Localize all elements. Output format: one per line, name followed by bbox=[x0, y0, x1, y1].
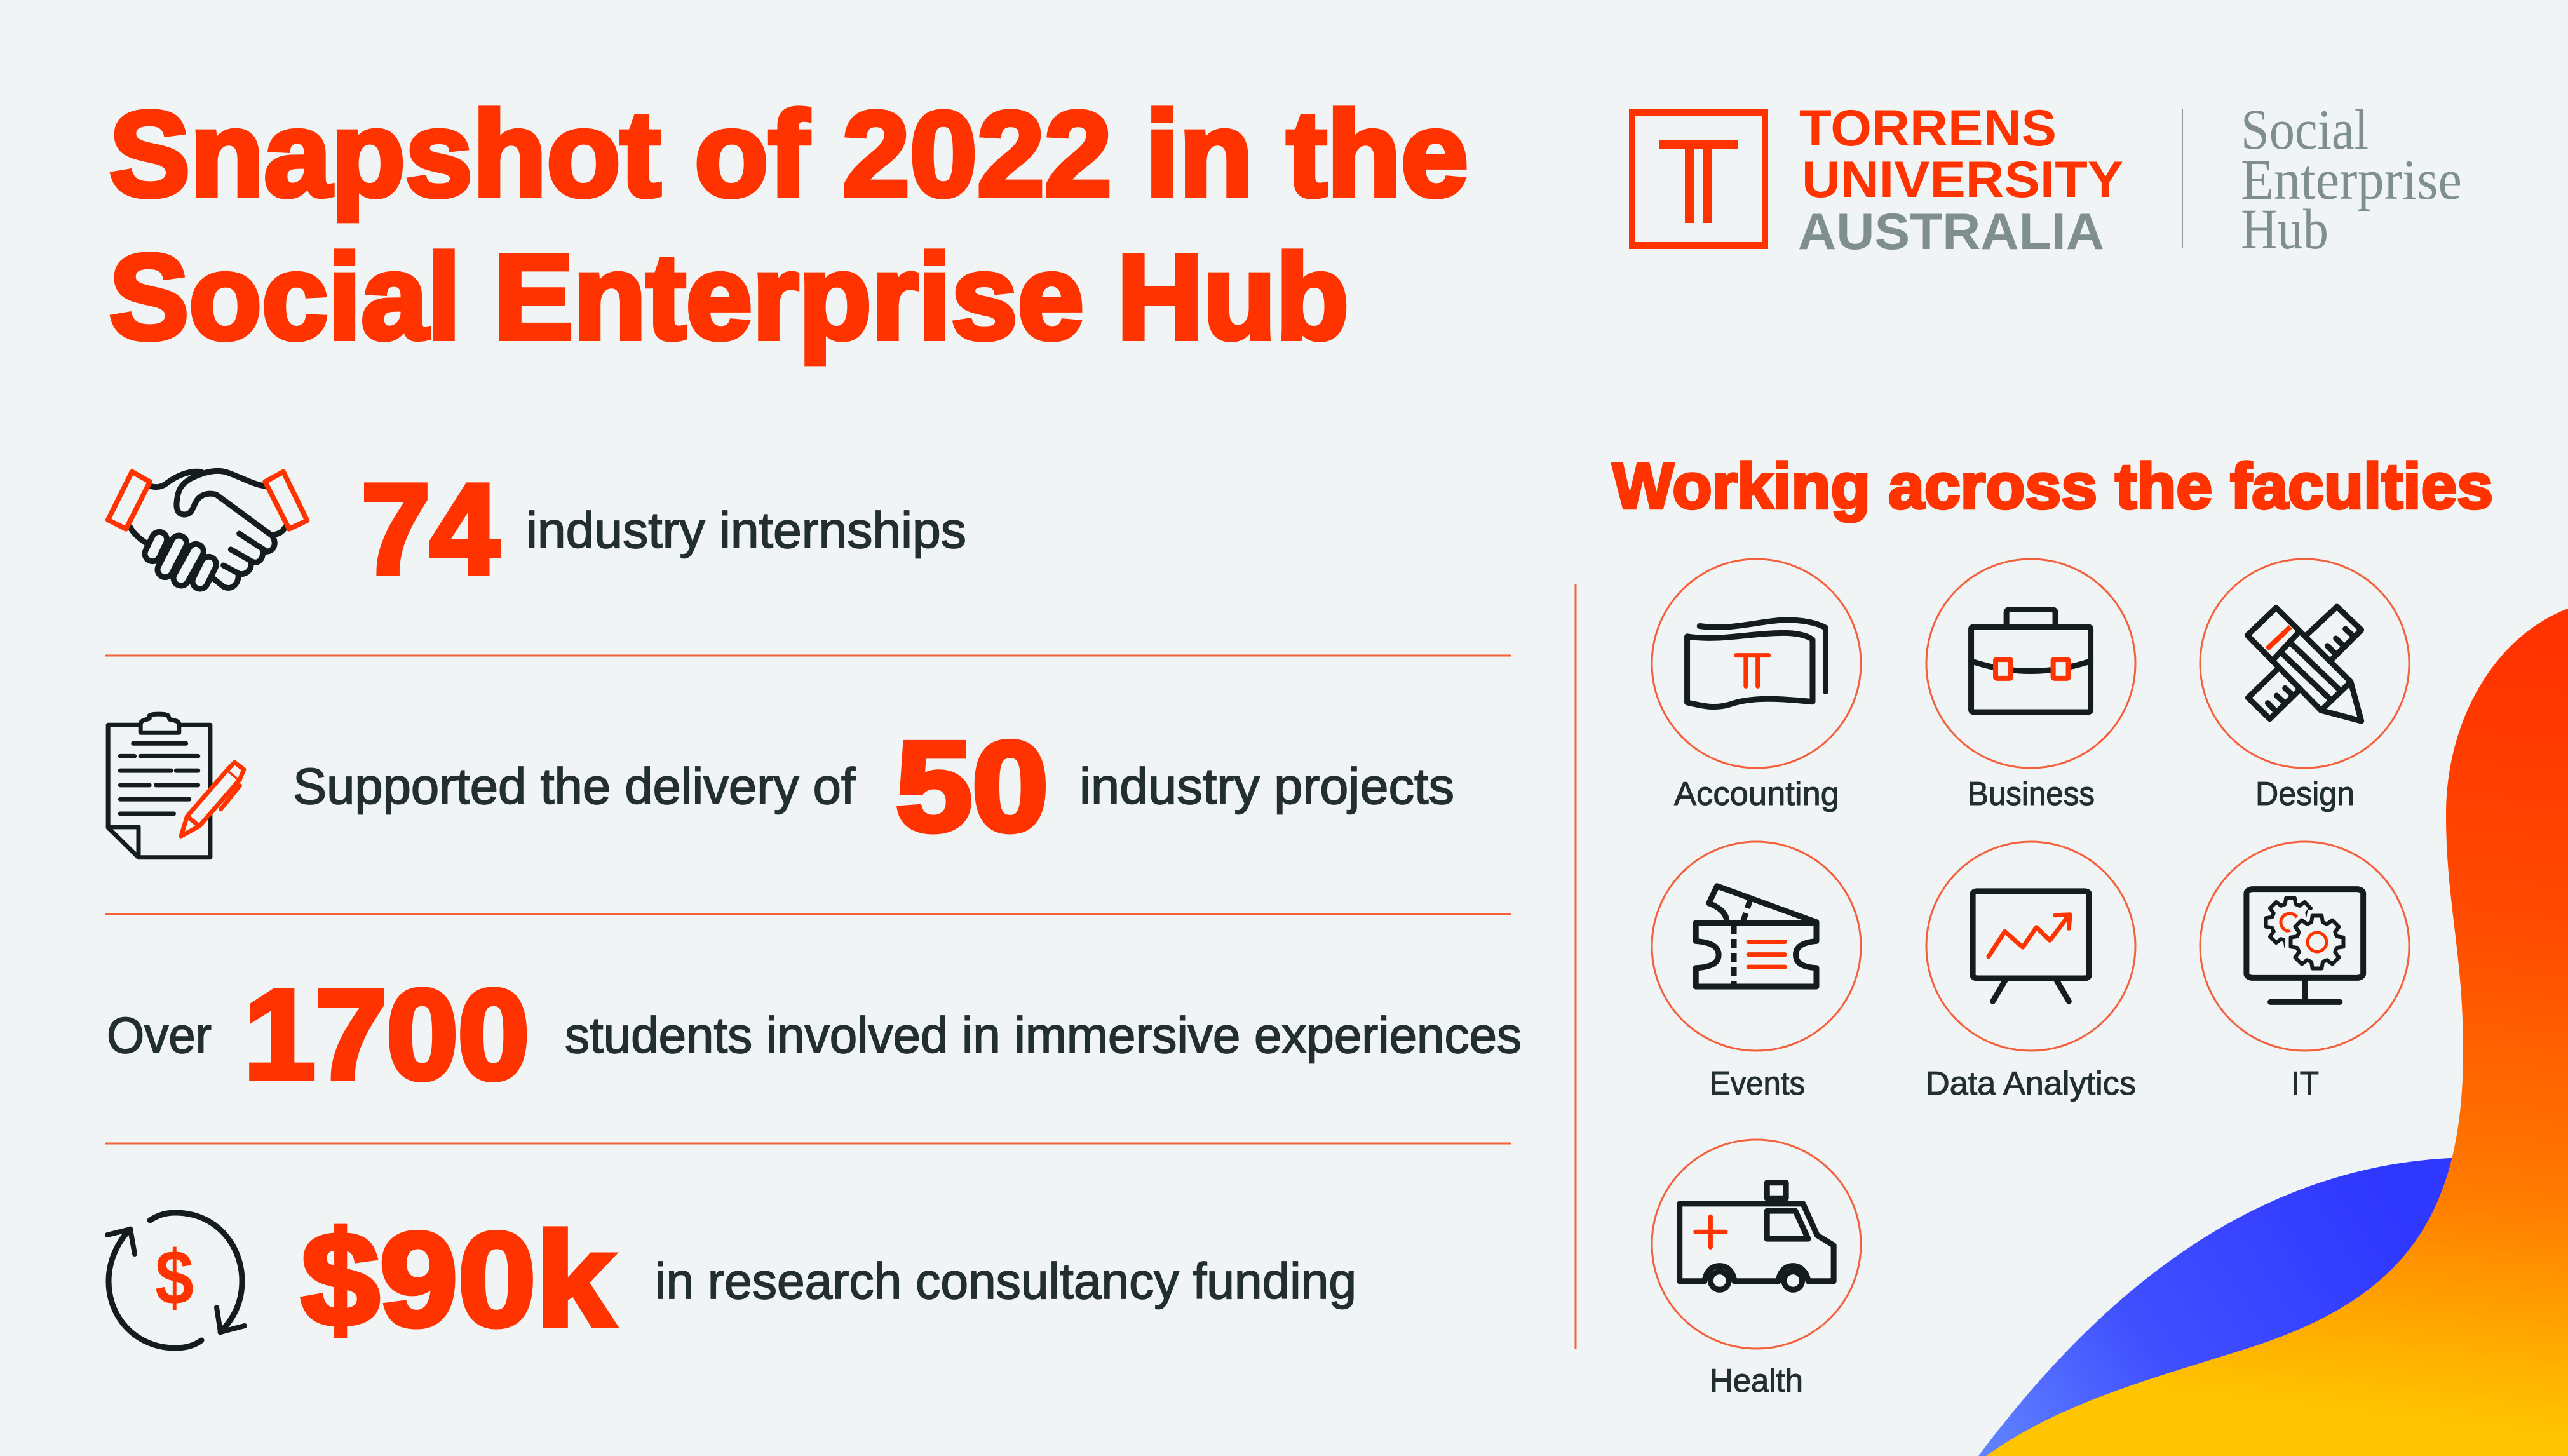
logo: Torrens University Australia, Social Enterprise Hub bbox=[1629, 98, 2462, 261]
logo mark bbox=[1629, 109, 1768, 249]
decorative blue wave bbox=[1978, 1157, 2478, 1456]
label: Health bbox=[1710, 1363, 1803, 1399]
logo wordmark: AUSTRALIA bbox=[1798, 203, 2104, 260]
label: industry projects: industry projects bbox=[1079, 758, 1454, 814]
figure: 1700: 1700 bbox=[244, 964, 529, 1105]
title: Snapshot of 2022 in the bbox=[109, 87, 1468, 222]
label: industry internships: industry internships bbox=[526, 502, 966, 558]
faculty: IT bbox=[2200, 842, 2409, 1102]
logo hub name: Enterprise bbox=[2241, 149, 2462, 212]
faculty: Events bbox=[1652, 842, 1861, 1102]
faculty: Data Analytics bbox=[1926, 842, 2136, 1102]
label: Business bbox=[1968, 776, 2095, 812]
title: Social Enterprise Hub bbox=[109, 230, 1349, 365]
icon: pencil and ruler bbox=[2247, 607, 2362, 721]
label: IT bbox=[2291, 1065, 2319, 1102]
faculty: Accounting bbox=[1652, 559, 1861, 812]
icon: circular dollar arrows bbox=[107, 1213, 245, 1348]
figure: 50: 50 bbox=[896, 716, 1048, 858]
title bbox=[109, 87, 1468, 365]
icon: banknotes bbox=[1687, 620, 1826, 707]
text: Over: Over bbox=[107, 1007, 212, 1063]
stat row: $90k in research consultancy funding bbox=[107, 1204, 1356, 1354]
label: Accounting bbox=[1674, 776, 1839, 812]
logo wordmark: TORRENS bbox=[1799, 100, 2057, 157]
label: in research consultancy funding: in research consultancy funding bbox=[655, 1253, 1356, 1309]
stat row: Supported the delivery of 50 industry projects bbox=[108, 714, 1454, 858]
logo wordmark bbox=[1798, 100, 2123, 260]
heading: Working across the faculties: Working across the faculties bbox=[1612, 451, 2493, 522]
label: Data Analytics bbox=[1926, 1065, 2136, 1102]
icon: presentation chart bbox=[1973, 891, 2089, 1001]
stat row: Over 1700 students bbox=[107, 964, 1522, 1105]
label: students involved in immersive experiences: students involved in immersive experiences bbox=[565, 1007, 1522, 1063]
icon: clipboard and pencil bbox=[108, 714, 244, 858]
icon: circular dollar arrows: $ bbox=[155, 1234, 194, 1321]
label: Events bbox=[1710, 1065, 1805, 1102]
icon: handshake bbox=[108, 471, 307, 588]
logo hub name: Hub bbox=[2241, 198, 2328, 261]
faculty: Health bbox=[1652, 1140, 1861, 1399]
stat row: 74 industry internships bbox=[108, 459, 966, 600]
figure: $90k: $90k bbox=[301, 1204, 614, 1354]
label: Design bbox=[2255, 776, 2355, 812]
icon: ambulance bbox=[1680, 1183, 1834, 1290]
faculty: Design bbox=[2200, 559, 2409, 812]
logo hub name: Social bbox=[2241, 98, 2369, 161]
logo wordmark: UNIVERSITY bbox=[1802, 151, 2123, 208]
decorative orange wave bbox=[1986, 609, 2568, 1456]
icon: monitor with gears bbox=[2247, 889, 2363, 1002]
icon: briefcase bbox=[1971, 609, 2091, 712]
logo hub name bbox=[2241, 98, 2462, 261]
text: Supported the delivery of: Supported the delivery of bbox=[293, 758, 856, 814]
faculty: Business bbox=[1926, 559, 2135, 812]
figure: 74: 74 bbox=[362, 459, 499, 600]
icon: ticket bbox=[1696, 886, 1816, 987]
